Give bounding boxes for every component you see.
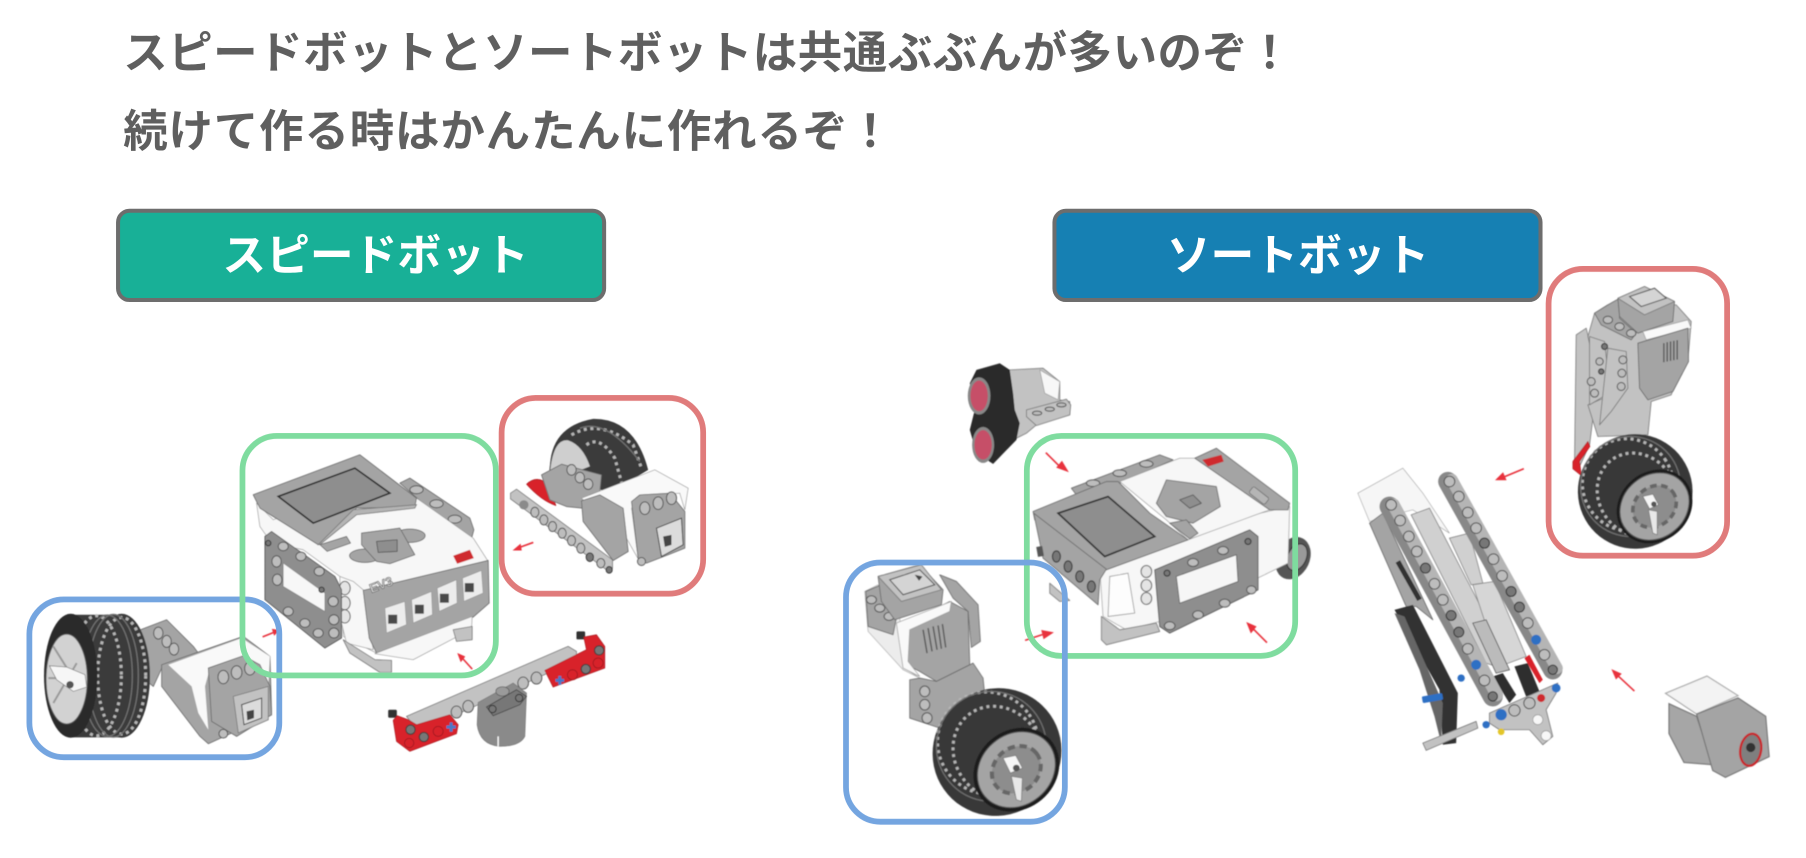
arrows: speed bot [263,542,533,669]
outline: speed bot brick group [242,436,496,675]
sensor: ultrasonic [968,363,1071,464]
title [123,29,1292,156]
outline: sort bot right wheel group [1549,269,1727,556]
outline: speed bot left wheel group [29,599,279,757]
outline: sort bot brick group [1027,436,1295,656]
outline: speed bot right wheel group [502,398,703,594]
brick: EV3 speed bot [253,455,489,672]
part: red beam with caster [388,631,605,751]
arrows: sort bot [1025,453,1634,691]
panel: sort bot parts [865,287,1769,841]
title: スピードボットとソートボットは共通ぶぶんが多いのぞ！ [123,29,1292,78]
assembly: sort bot arm [1358,468,1560,750]
heading: speed bot: スピードボット [222,232,529,281]
title: 続けて作る時はかんたんに作れるぞ！ [123,107,893,156]
motor: right wheel speed bot [511,419,688,573]
heading: sort bot [1054,211,1541,300]
panel: speed bot parts [44,419,688,751]
motor: left wheel sort bot [865,565,1087,841]
motor: right wheel sort bot [1555,287,1715,571]
heading: speed bot [118,211,604,300]
outline: sort bot left wheel group [846,563,1065,822]
brick: EV3 speed bot: EV3 [368,574,395,596]
wheel: brick rear caster [1269,531,1317,585]
heading: sort bot: ソートボット [1167,232,1429,281]
brick: EV3 sort bot [1033,448,1290,645]
motor: left wheel speed bot [44,614,272,744]
sensor: color [1665,676,1769,777]
